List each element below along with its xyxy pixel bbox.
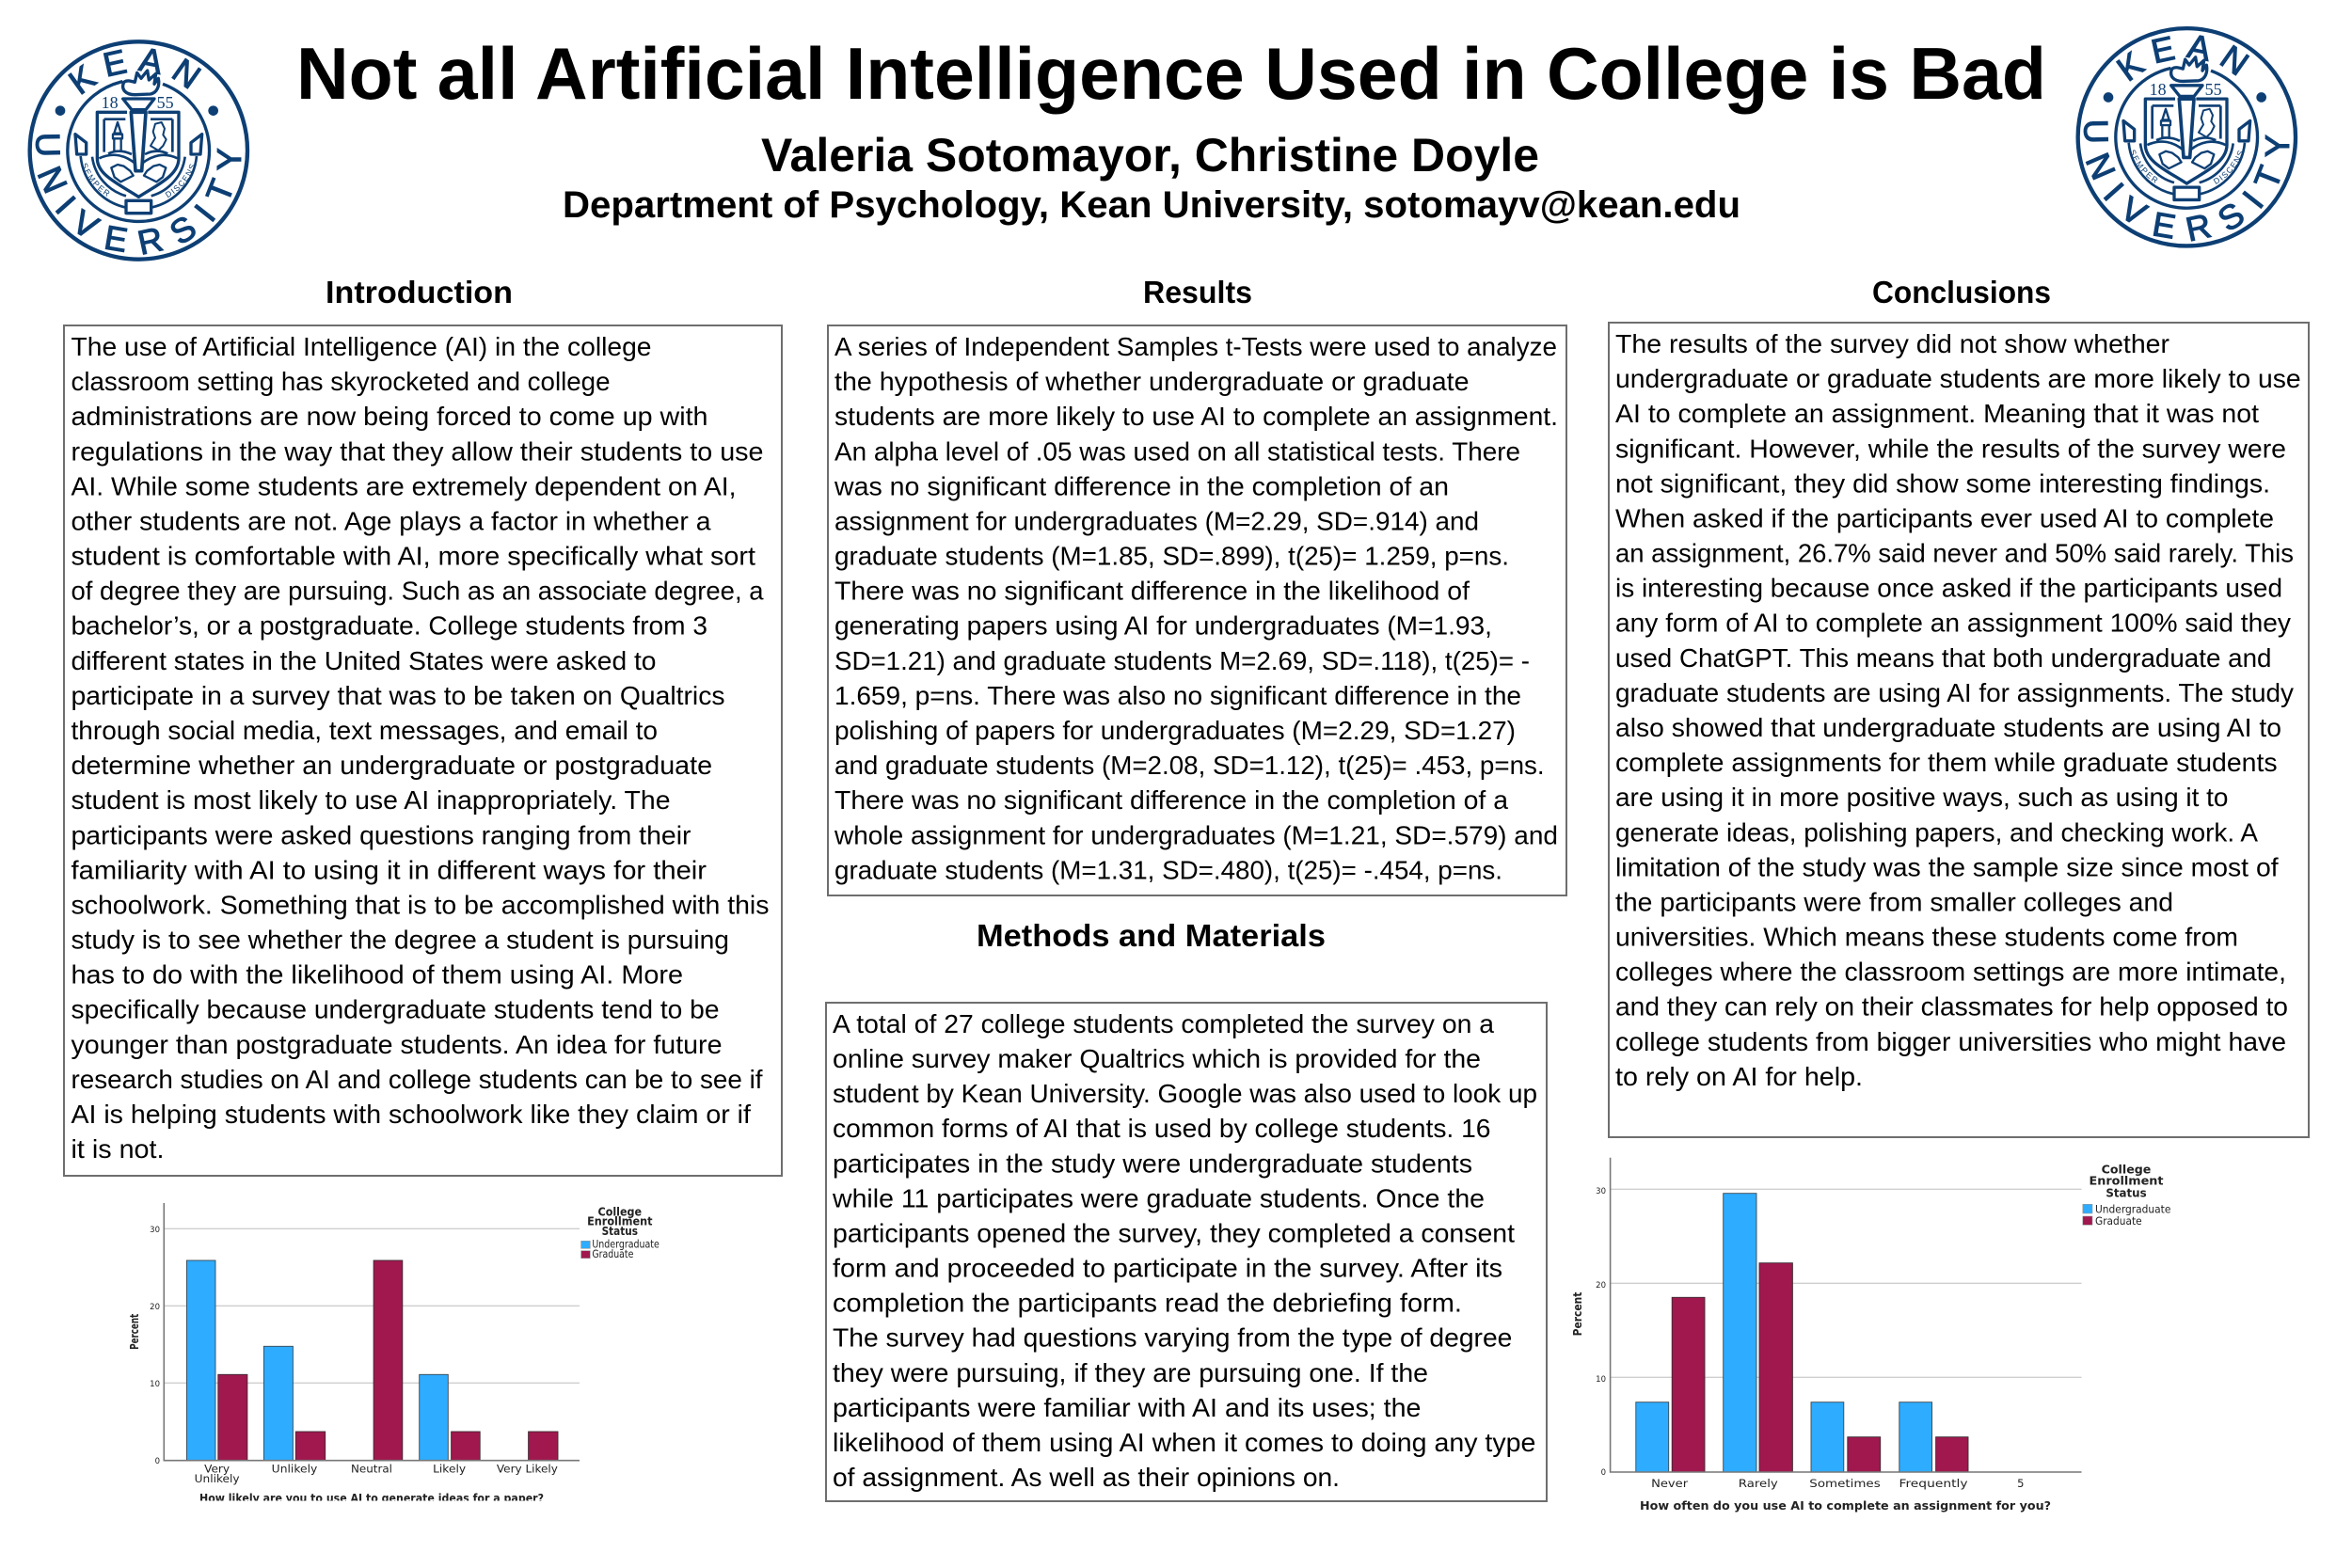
- y axis tick labels: 30: [150, 1226, 160, 1235]
- panel: Conclusions: significant. However, while the results of the survey were: [1615, 434, 2286, 463]
- panel: Introduction: specifically because undergraduate students tend to be: [72, 995, 720, 1024]
- bar chart: likelihood of using AI to generate ideas: [128, 1203, 660, 1505]
- y axis tick labels: [1596, 1187, 1606, 1478]
- panel: Introduction: student is most likely to use AI inappropriately. The: [72, 785, 670, 815]
- heading: Results: Results: [1143, 275, 1252, 309]
- panel: Conclusions: [1609, 323, 2309, 1137]
- panel: Conclusions: and they can rely on their classmates for help opposed to: [1615, 992, 2288, 1022]
- y axis title: Percent: [1571, 1291, 1584, 1336]
- panel: Introduction: AI. While some students are extremely dependent on AI,: [72, 471, 736, 500]
- x axis category labels: [1651, 1477, 2024, 1490]
- panel: Results: There was no significant difference in the likelihood of: [834, 577, 1470, 606]
- panel: Introduction: familiarity with AI to using it in different ways for their: [72, 855, 707, 884]
- panel: Conclusions: not significant, they did show some interesting findings.: [1615, 468, 2270, 498]
- logo: Kean University seal, right: 55: [2205, 80, 2222, 99]
- panel: Results: An alpha level of .05 was used on all statistical tests. There: [834, 436, 1520, 466]
- panel: Conclusions: an assignment, 26.7% said never and 50% said rarely. This: [1615, 538, 2294, 568]
- legend: College: [2102, 1163, 2151, 1176]
- legend: Graduate: [592, 1247, 633, 1260]
- panel: Introduction: research studies on AI and college students can be to see if: [72, 1065, 763, 1094]
- panel: Introduction: participants were asked questions ranging from their: [72, 820, 691, 849]
- panel: Methods and Materials: of assignment. As well as their opinions on.: [833, 1463, 1340, 1492]
- x axis category labels: [195, 1463, 558, 1485]
- panel: Introduction: administrations are now being forced to come up with: [72, 402, 707, 431]
- heading: Methods and Materials: Methods and Materials: [977, 918, 1326, 953]
- y axis tick labels: 0: [1601, 1468, 1606, 1478]
- panel: Introduction: [64, 325, 782, 1176]
- panel: Results: A series of Independent Samples t-Tests were used to analyze: [834, 332, 1557, 361]
- panel: Conclusions: undergraduate or graduate students are more likely to use: [1615, 364, 2301, 393]
- x axis category labels: Unlikely: [272, 1463, 318, 1476]
- panel: Introduction: classroom setting has skyrocketed and college: [72, 367, 610, 396]
- panel: Methods and Materials: participants opened the survey, they completed a consent: [833, 1219, 1515, 1247]
- panel: Methods and Materials: participants were familiar with AI and its uses; the: [833, 1393, 1421, 1422]
- panel: Conclusions: universities. Which means these students come from: [1615, 922, 2238, 952]
- panel: Conclusions: colleges where the classroom settings are more intimate,: [1615, 958, 2286, 987]
- x axis category labels: Unlikely: [195, 1472, 240, 1485]
- affiliation: Department of Psychology, Kean University, sotomayv@kean.edu: [563, 184, 1740, 226]
- panel: Methods and Materials: [826, 1003, 1547, 1501]
- heading: Conclusions: Conclusions: [1872, 275, 2051, 309]
- logo: Kean University seal, right: 18: [2150, 80, 2167, 99]
- title: Not all Artificial Intelligence Used in College is Bad: [296, 32, 2046, 115]
- panel: Conclusions: is interesting because once asked if the participants used: [1615, 574, 2282, 603]
- panel: Introduction: AI is helping students with schoolwork like they claim or if: [72, 1100, 751, 1129]
- panel: Results: the hypothesis of whether undergraduate or graduate: [834, 367, 1470, 396]
- panel: Introduction: study is to see whether the degree a student is pursuing: [72, 926, 729, 954]
- logo: Kean University seal, right: [2075, 26, 2297, 248]
- legend: [581, 1205, 660, 1260]
- panel: Results: [828, 325, 1566, 895]
- legend: Graduate: [2095, 1214, 2142, 1227]
- y axis title: Percent: [128, 1314, 141, 1350]
- panel: Introduction: participate in a survey that was to be taken on Qualtrics: [72, 681, 725, 710]
- panel: Introduction: different states in the United States were asked to: [72, 646, 657, 675]
- x axis category labels: 5: [2017, 1477, 2024, 1490]
- panel: Conclusions: generate ideas, polishing papers, and checking work. A: [1615, 817, 2258, 847]
- panel: Introduction: of degree they are pursuing. Such as an associate degree, a: [72, 577, 764, 606]
- logo: Kean University seal, left: 55: [157, 93, 174, 112]
- panel: Conclusions: used ChatGPT. This means that both undergraduate and: [1615, 643, 2271, 673]
- panel: Conclusions: When asked if the participants ever used AI to complete: [1615, 504, 2274, 532]
- y axis tick labels: 10: [150, 1380, 160, 1389]
- legend: Undergraduate: [2095, 1203, 2170, 1216]
- panel: Introduction: it is not.: [72, 1134, 164, 1164]
- y axis tick labels: 30: [1596, 1187, 1606, 1196]
- panel: Conclusions: complete assignments for them while graduate students: [1615, 748, 2278, 777]
- panel: Introduction: regulations in the way that they allow their students to use: [72, 436, 764, 466]
- x axis title: How often do you use AI to complete an assignment for you?: [1640, 1499, 2051, 1513]
- x axis category labels: Very: [204, 1463, 230, 1476]
- x axis category labels: Sometimes: [1809, 1477, 1881, 1490]
- logo: Kean University seal, left: UNIVERSITY: [36, 134, 241, 255]
- legend: Enrollment: [587, 1215, 653, 1228]
- panel: Introduction: determine whether an undergraduate or postgraduate: [72, 751, 712, 780]
- panel: Results: and graduate students (M=2.08, SD=1.12), t(25)= .453, p=ns.: [834, 751, 1545, 780]
- bars: [186, 1260, 558, 1461]
- logo: Kean University seal, left: SEMPER: [85, 164, 109, 197]
- panel: Methods and Materials: completion the participants read the debriefing form.: [833, 1289, 1462, 1318]
- panel: Conclusions: also showed that undergraduate students are using AI to: [1615, 713, 2281, 742]
- authors: Valeria Sotomayor, Christine Doyle: [761, 129, 1539, 182]
- legend: Enrollment: [2089, 1175, 2164, 1188]
- y axis tick labels: 20: [150, 1303, 160, 1312]
- panel: Conclusions: the participants were from smaller colleges and: [1615, 887, 2173, 916]
- legend: Status: [2106, 1186, 2147, 1199]
- panel: Introduction: student is comfortable with AI, more specifically what sort: [72, 542, 755, 570]
- panel: Results: graduate students (M=1.31, SD=.480), t(25)= -.454, p=ns.: [834, 855, 1502, 884]
- panel: Conclusions: limitation of the study was the sample size since most of: [1615, 852, 2279, 881]
- logo: Kean University seal, right: KEAN: [2115, 35, 2250, 82]
- panel: Introduction: schoolwork. Something that is to be accomplished with this: [72, 890, 770, 919]
- x axis category labels: Neutral: [351, 1463, 392, 1476]
- logo: Kean University seal, right: SEMPER: [2132, 150, 2158, 183]
- panel: Introduction: has to do with the likelihood of them using AI. More: [72, 960, 683, 990]
- logo: Kean University seal, left: KEAN: [68, 48, 201, 95]
- panel: Conclusions: The results of the survey did not show whether: [1615, 329, 2169, 358]
- panel: Methods and Materials: while 11 participates were graduate students. Once the: [832, 1183, 1485, 1212]
- panel: Introduction: The use of Artificial Intelligence (AI) in the college: [72, 332, 651, 361]
- logo: Kean University seal, left: DISCENS: [166, 164, 194, 198]
- panel: Methods and Materials: common forms of AI that is used by college students. 16: [833, 1114, 1490, 1143]
- panel: Methods and Materials: form and proceeded to participate in the survey. After its: [833, 1254, 1502, 1283]
- panel: Conclusions: college students from bigger universities who might have: [1615, 1027, 2286, 1056]
- panel: Results: was no significant difference in the completion of an: [834, 471, 1449, 500]
- x axis category labels: Frequently: [1899, 1477, 1968, 1490]
- panel: Methods and Materials: they were pursuing, if they are pursuing one. If the: [833, 1358, 1428, 1387]
- heading: Introduction: Introduction: [326, 275, 513, 309]
- panel: Conclusions: AI to complete an assignment. Meaning that it was not: [1615, 399, 2259, 428]
- panel: Results: generating papers using AI for undergraduates (M=1.93,: [834, 611, 1492, 641]
- panel: Introduction: bachelor’s, or a postgraduate. College students from 3: [72, 611, 707, 641]
- panel: Introduction: through social media, text messages, and email to: [72, 716, 658, 745]
- panel: Conclusions: any form of AI to complete an assignment 100% said they: [1615, 609, 2291, 638]
- x axis category labels: Very Likely: [497, 1463, 558, 1476]
- panel: Methods and Materials: student by Kean University. Google was also used to look up: [833, 1079, 1537, 1108]
- panel: Methods and Materials: A total of 27 college students completed the survey on a: [833, 1009, 1494, 1038]
- logo: Kean University seal, right: DISCENS: [2213, 150, 2242, 184]
- legend: College: [598, 1205, 642, 1218]
- legend: Undergraduate: [592, 1237, 660, 1250]
- panel: Results: assignment for undergraduates (M=2.29, SD=.914) and: [834, 506, 1479, 536]
- legend: Status: [602, 1225, 638, 1238]
- bars: [1636, 1194, 1968, 1472]
- x axis category labels: Likely: [433, 1463, 466, 1476]
- logo: Kean University seal, left: [28, 40, 250, 261]
- x axis title: How likely are you to use AI to generate ideas for a paper?: [199, 1492, 544, 1505]
- panel: Methods and Materials: The survey had questions varying from the type of degree: [833, 1323, 1512, 1353]
- legend: [2083, 1163, 2170, 1227]
- panel: Results: SD=1.21) and graduate students M=2.69, SD=.118), t(25)= -: [834, 646, 1530, 675]
- panel: Conclusions: to rely on AI for help.: [1615, 1062, 1863, 1091]
- panel: Results: There was no significant difference in the completion of a: [834, 785, 1508, 815]
- panel: Results: whole assignment for undergraduates (M=1.21, SD=.579) and: [834, 820, 1558, 849]
- panel: Results: polishing of papers for undergraduates (M=2.29, SD=1.27): [834, 716, 1516, 745]
- panel: Results: graduate students (M=1.85, SD=.899), t(25)= 1.259, p=ns.: [834, 542, 1509, 570]
- logo: Kean University seal, right: UNIVERSITY: [2083, 120, 2290, 242]
- panel: Methods and Materials: online survey maker Qualtrics which is provided for the: [833, 1044, 1481, 1073]
- y axis tick labels: [150, 1226, 160, 1466]
- y axis tick labels: 20: [1596, 1281, 1606, 1291]
- panel: Methods and Materials: likelihood of them using AI when it comes to doing any type: [833, 1428, 1535, 1457]
- panel: Introduction: other students are not. Age plays a factor in whether a: [72, 506, 711, 536]
- x axis category labels: Rarely: [1739, 1477, 1778, 1490]
- logo: Kean University seal, left: 18: [102, 93, 119, 112]
- panel: Results: 1.659, p=ns. There was also no significant difference in the: [834, 681, 1521, 710]
- y axis tick labels: 0: [155, 1457, 160, 1466]
- panel: Conclusions: graduate students are using AI for assignments. The study: [1615, 678, 2294, 707]
- y axis tick labels: 10: [1596, 1375, 1606, 1385]
- x axis category labels: Never: [1651, 1477, 1688, 1490]
- bar chart: how often AI is used to complete an assignment: [1571, 1158, 2170, 1513]
- panel: Methods and Materials: participates in the study were undergraduate students: [833, 1148, 1472, 1178]
- panel: Introduction: younger than postgraduate students. An idea for future: [72, 1030, 723, 1059]
- panel: Conclusions: are using it in more positive ways, such as using it to: [1615, 783, 2228, 812]
- panel: Results: students are more likely to use AI to complete an assignment.: [834, 402, 1558, 431]
